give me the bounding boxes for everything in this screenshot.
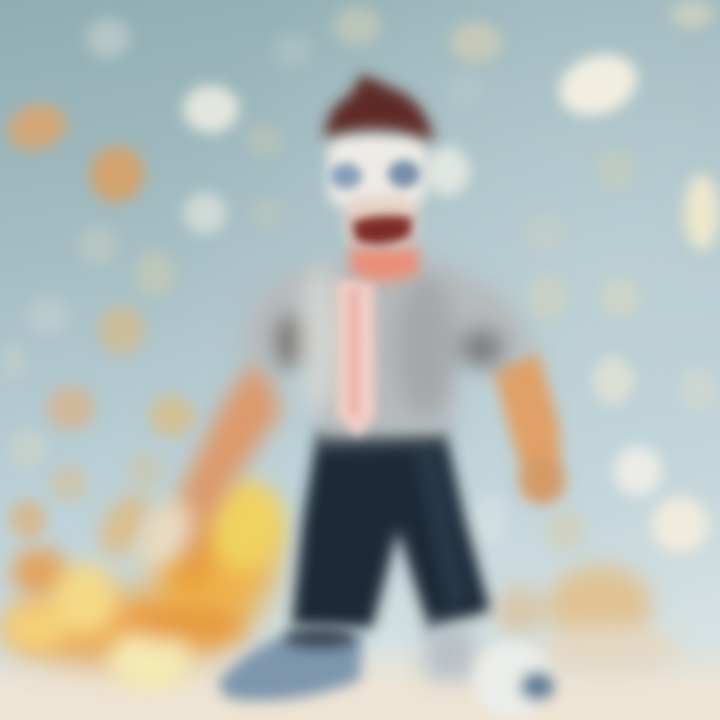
hair xyxy=(324,74,434,142)
tie xyxy=(336,280,376,437)
orange coins xyxy=(2,98,195,538)
goggles xyxy=(330,160,420,189)
gold pile xyxy=(3,479,285,690)
face xyxy=(328,135,426,246)
pants xyxy=(292,430,490,632)
mustache xyxy=(352,216,412,244)
shirt xyxy=(238,262,535,440)
ground xyxy=(0,640,720,720)
right beige pile xyxy=(494,565,680,674)
right shin xyxy=(425,625,475,680)
ball xyxy=(474,642,554,718)
neck xyxy=(350,245,420,281)
character xyxy=(130,74,565,718)
left arm xyxy=(130,355,282,577)
left shoe xyxy=(218,626,362,701)
large foreground coins xyxy=(550,44,720,250)
right arm xyxy=(492,352,565,504)
falling pale coins xyxy=(2,0,718,553)
